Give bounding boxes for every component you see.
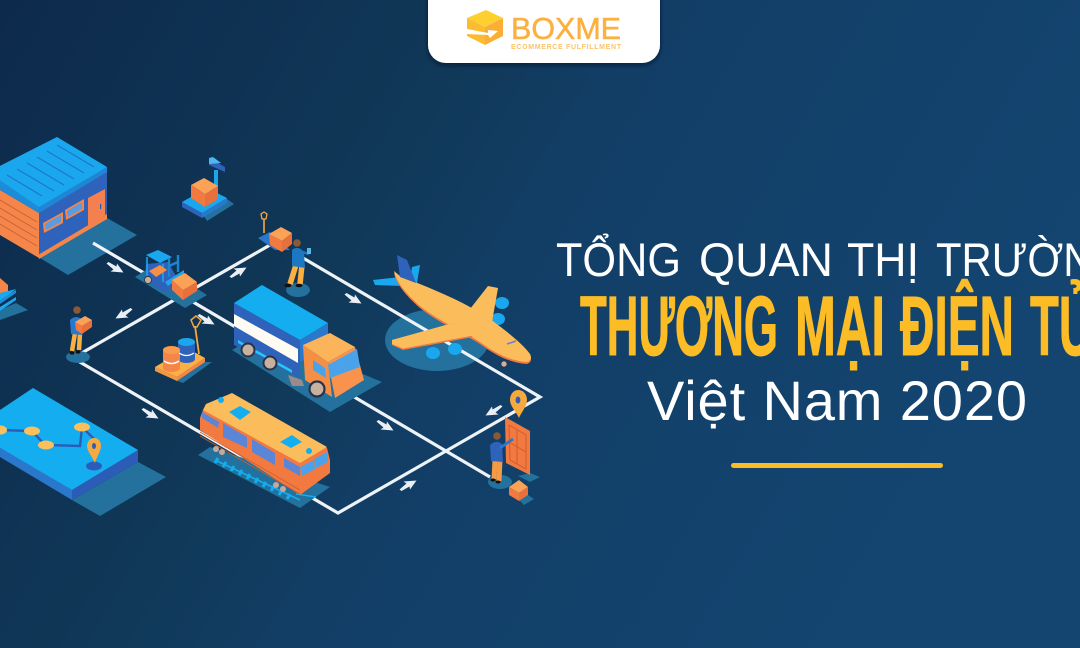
icon: customer at door bbox=[488, 417, 540, 489]
logo tab bbox=[428, 0, 660, 63]
logistics route roads bbox=[73, 243, 540, 513]
icon: worker with tablet bbox=[284, 239, 311, 297]
icon: shelf stub at left edge bbox=[0, 278, 28, 320]
icon: destination pin bbox=[510, 390, 527, 418]
icon: delivery truck bbox=[232, 285, 382, 412]
logo tagline: ECOMMERCE FULFILLMENT bbox=[511, 44, 622, 51]
icon: train bus bbox=[198, 393, 330, 508]
icon: worker carrying parcel bbox=[66, 306, 92, 363]
accent underline bbox=[731, 463, 943, 468]
title line 2: MẠI bbox=[795, 279, 885, 373]
logo cube bbox=[467, 10, 503, 45]
title line 3: Việt Nam 2020 bbox=[647, 369, 1027, 432]
route direction arrows bbox=[106, 262, 502, 491]
ground shadows under roads bbox=[40, 218, 489, 371]
icon: parcel station with shovel bbox=[258, 212, 292, 252]
title line 2: THƯƠNG bbox=[580, 279, 778, 373]
title line 1: TỔNG bbox=[556, 233, 681, 286]
icon: barrels on pallet truck bbox=[155, 316, 212, 383]
icon: airplane bbox=[373, 255, 531, 367]
title line 1: THỊ bbox=[847, 233, 919, 286]
logo wordmark: BOXME bbox=[511, 11, 621, 46]
icon: parcel at door bbox=[509, 480, 534, 505]
title line 1: QUAN bbox=[699, 233, 833, 286]
icon: forklift bbox=[135, 250, 207, 308]
icon: warehouse bbox=[0, 137, 107, 259]
title line 1 bbox=[556, 233, 1080, 286]
icon: route map block bbox=[0, 388, 166, 516]
icon: parcel on scale bbox=[182, 157, 234, 221]
